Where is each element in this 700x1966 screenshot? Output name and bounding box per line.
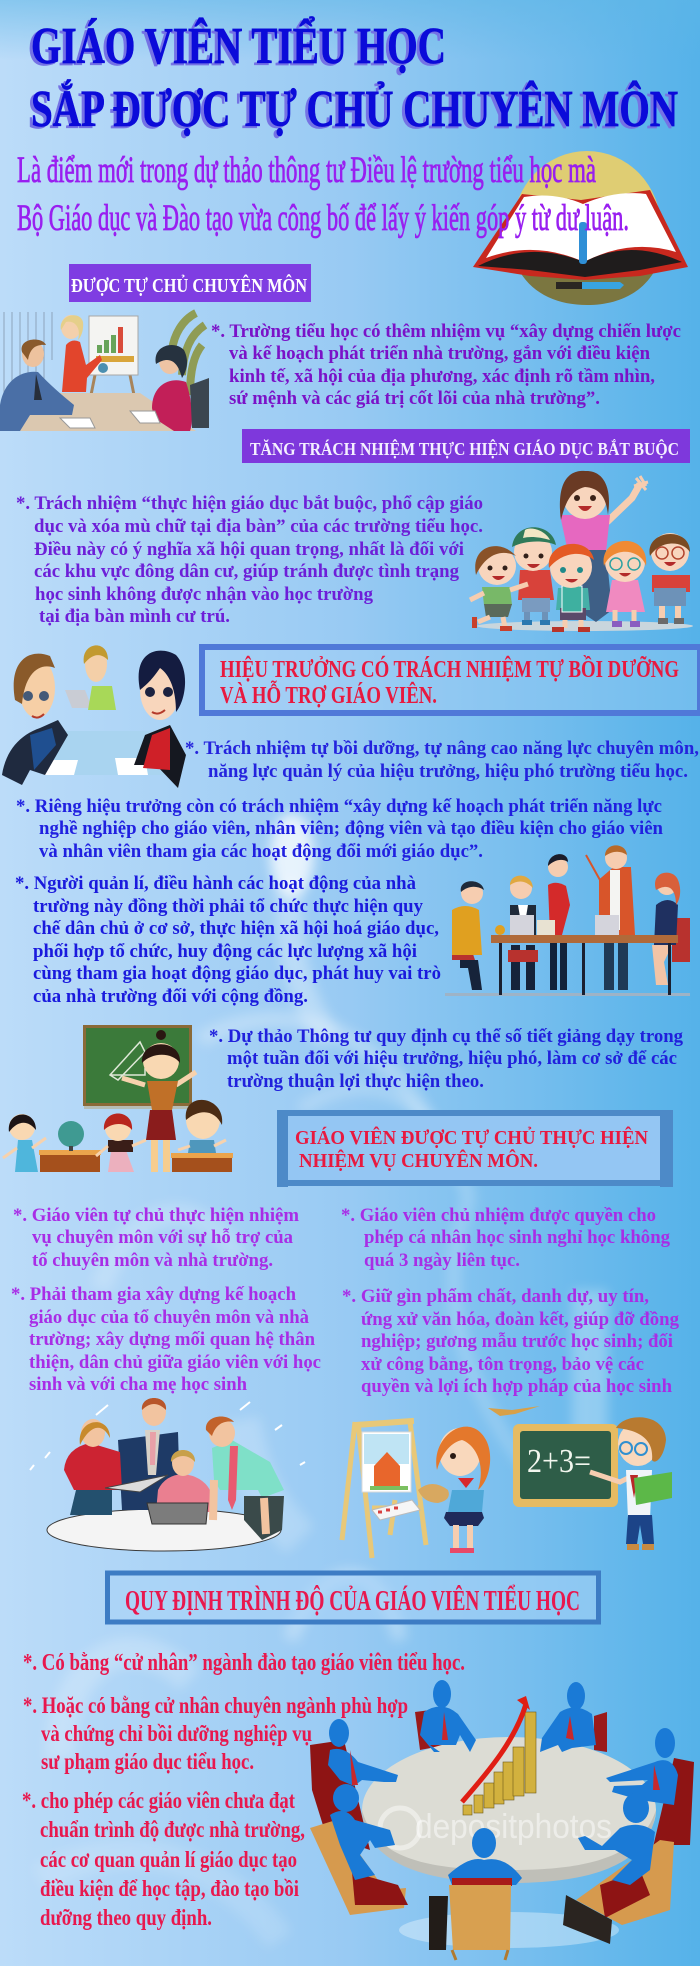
paragraph: số tiết giảng dạy: *. Dự thảo Thông tư quy định cụ thể số tiết giảng dạy trong (209, 1026, 683, 1047)
paragraph: chưa đạt chuẩn: các cơ quan quản lí giáo dục tạo (40, 1847, 297, 1872)
heading: tăng trách nhiệm (242, 429, 690, 463)
kid B (512, 527, 556, 625)
paragraph: chứng chỉ bồi dưỡng: và chứng chỉ bồi dưỡng nghiệp vụ (41, 1721, 312, 1746)
illustration: teacher with pupils (3, 1025, 233, 1172)
kid D (604, 541, 646, 627)
person A (420, 1680, 476, 1752)
paragraph: chứng chỉ bồi dưỡng (23, 1693, 408, 1774)
paragraph: số tiết giảng dạy: một tuần đối với hiệu trưởng, hiệu phó, làm cơ sở để các (227, 1048, 677, 1069)
paragraph: giáo dục bắt buộc (16, 493, 483, 627)
paragraph: nhiệm vụ xây dựng chiến lược: kinh tế, xã hội của địa phương, xác định rõ tầm nhìn, (229, 366, 655, 387)
illustration: painting girl and boy at blackboard (342, 1406, 672, 1558)
heading: giáo viên được tự chủ: NHIỆM VỤ CHUYÊN MÔN. (299, 1148, 538, 1172)
briefcases (429, 1895, 612, 1950)
paragraph: tự bồi dưỡng (185, 738, 699, 782)
paragraph: chứng chỉ bồi dưỡng: *. Hoặc có bằng cử nhân chuyên ngành phù hợp (23, 1693, 408, 1718)
paragraph: hỗ trợ của tổ chuyên môn (13, 1205, 299, 1271)
paragraph: giáo dục bắt buộc: dục và xóa mù chữ tại địa bàn” của các trường tiểu học. (34, 516, 483, 537)
paragraph: bằng cử nhân: *. Có bằng “cử nhân” ngành đào tạo giáo viên tiểu học. (23, 1650, 465, 1676)
board sum: 2+3= (527, 1443, 591, 1480)
person E with chair (310, 1784, 408, 1915)
paragraph: số tiết giảng dạy: trường thuận lợi thực hiện theo. (227, 1071, 484, 1092)
paragraph: chưa đạt chuẩn: chuẩn trình độ được nhà trường, (40, 1817, 305, 1842)
person G with chair (448, 1828, 522, 1960)
paragraph: dân chủ ở cơ sở (15, 873, 441, 1007)
paragraph: kế hoạch phát triển năng lực (16, 796, 663, 862)
illustration: round table meeting with growth chart (310, 1680, 694, 1960)
illustration: school leaders at table (2, 645, 186, 788)
kid C (549, 544, 594, 632)
paragraph: kế hoạch phát triển năng lực: nghề nghiệp cho giáo viên, nhân viên; động viên và tạo điều kiện cho giáo viên (39, 818, 663, 839)
paragraph: dân chủ ở cơ sở: chế dân chủ ở cơ sở, thực hiện xã hội hoá giáo dục, (33, 918, 439, 939)
paragraph: giữ gìn phẩm chất: *. Giữ gìn phẩm chất, danh dự, uy tín, (342, 1286, 649, 1307)
kid E (649, 533, 690, 624)
person B (540, 1682, 596, 1752)
paragraph: hỗ trợ của tổ chuyên môn: tổ chuyên môn và nhà trường. (32, 1250, 273, 1271)
paragraph: học sinh nghỉ học (341, 1205, 670, 1271)
paragraph: dân chủ ở cơ sở: *. Người quản lí, điều hành các hoạt động của nhà (15, 873, 416, 894)
paragraph: giáo dục bắt buộc: *. Trách nhiệm “thực hiện giáo dục bắt buộc, phổ cập giáo (16, 493, 483, 514)
paragraph: học sinh nghỉ học: phép cá nhân học sinh nghỉ học không (364, 1227, 670, 1248)
paragraph: dân chủ ở cơ sở: của nhà trường đối với cộng đồng. (33, 986, 308, 1007)
paragraph: tự bồi dưỡng: *. Trách nhiệm tự bồi dưỡng, tự nâng cao năng lực chuyên môn, (185, 738, 699, 759)
paragraph: tự bồi dưỡng: năng lực quản lý của hiệu trưởng, hiệu phó trường tiểu học. (208, 761, 688, 782)
heading: giáo viên được tự chủ: GIÁO VIÊN ĐƯỢC TỰ CHỦ THỰC HIỆN (295, 1125, 648, 1149)
heading: được tự chủ chuyên môn: ĐƯỢC TỰ CHỦ CHUYÊN MÔN (71, 273, 307, 297)
paragraph: nhiệm vụ xây dựng chiến lược: sứ mệnh và các giá trị cốt lõi của nhà trường”. (229, 388, 600, 409)
paragraph: chưa đạt chuẩn (22, 1788, 305, 1930)
watermark: depositphotos (415, 1808, 612, 1846)
paragraph: giáo dục bắt buộc: các khu vực đông dân cư, giúp tránh được tình trạng (34, 561, 459, 582)
paragraph: giữ gìn phẩm chất: quyền và lợi ích hợp pháp của học sinh (361, 1376, 672, 1397)
paragraph: nhiệm vụ xây dựng chiến lược (211, 321, 681, 409)
paragraph: chứng chỉ bồi dưỡng: sư phạm giáo dục tiểu học. (41, 1749, 254, 1774)
kid A (470, 546, 528, 631)
paragraph: hỗ trợ của tổ chuyên môn: *. Giáo viên tự chủ thực hiện nhiệm (13, 1205, 299, 1226)
paragraph: kế hoạch phát triển năng lực: *. Riêng hiệu trưởng còn có trách nhiệm “xây dựng kế hoạch phát triển năng lực (16, 796, 662, 817)
illustration: team around long table (445, 845, 690, 996)
paragraph: giáo dục bắt buộc: Điều này có ý nghĩa xã hội quan trọng, nhất là đối với (34, 539, 464, 560)
heading: hiệu trưởng (202, 647, 700, 713)
paragraph: kế hoạch phát triển năng lực: và nhân viên tham gia các hoạt động đổi mới giáo dục”. (39, 841, 483, 862)
paragraph: chưa đạt chuẩn: dưỡng theo quy định. (40, 1905, 212, 1930)
illustration: open book with pen (473, 151, 688, 305)
intro text (17, 150, 629, 239)
person C (328, 1719, 398, 1786)
paragraph: xây dựng kế hoạch giáo dục: *. Phải tham gia xây dựng kế hoạch (11, 1284, 296, 1305)
paragraph: chưa đạt chuẩn: điều kiện để học tập, đào tạo bồi (40, 1876, 299, 1901)
paragraph: dân chủ ở cơ sở: cùng tham gia hoạt động giáo dục, phát huy vai trò (33, 963, 441, 984)
paragraph: nhiệm vụ xây dựng chiến lược: và kế hoạch phát triển nhà trường, gắn với điều kiện (229, 343, 650, 364)
paragraph: giữ gìn phẩm chất: nghiệp; gương mẫu trước học sinh; đối (361, 1331, 673, 1352)
paragraph: học sinh nghỉ học: *. Giáo viên chủ nhiệm được quyền cho (341, 1205, 656, 1226)
paragraph: chưa đạt chuẩn: *. cho phép các giáo viên chưa đạt (22, 1788, 295, 1813)
paragraph: giữ gìn phẩm chất: xử công bằng, tôn trọng, bảo vệ các (361, 1354, 644, 1375)
illustration: teacher and children (470, 471, 693, 632)
paragraph: dân chủ ở cơ sở: trường này đồng thời phải tổ chức thực hiện quy (33, 896, 423, 917)
paragraph: xây dựng kế hoạch giáo dục: giáo dục của tổ chuyên môn và nhà (29, 1307, 309, 1328)
paragraph: giữ gìn phẩm chất (342, 1286, 679, 1397)
paragraph: giáo dục bắt buộc: tại địa bàn mình cư trú. (39, 606, 230, 627)
paragraph: nhiệm vụ xây dựng chiến lược: *. Trường tiểu học có thêm nhiệm vụ “xây dựng chiến lược (211, 321, 681, 342)
heading: được tự chủ chuyên môn (69, 264, 311, 302)
heading: quy định trình độ (108, 1573, 598, 1622)
paragraph: hỗ trợ của tổ chuyên môn: vụ chuyên môn với sự hỗ trợ của (32, 1227, 293, 1248)
paragraph: giữ gìn phẩm chất: ứng xử văn hóa, đoàn kết, giúp đỡ đồng (361, 1309, 679, 1330)
title (31, 16, 678, 138)
heading: hiệu trưởng: VÀ HỖ TRỢ GIÁO VIÊN. (220, 681, 437, 709)
person F with chair (576, 1793, 674, 1925)
paragraph: giáo dục bắt buộc: học sinh không được nhận vào học trường (35, 584, 373, 605)
paragraph: xây dựng kế hoạch giáo dục (11, 1284, 321, 1395)
paragraph: dân chủ ở cơ sở: phối hợp tổ chức, huy động các lực lượng xã hội (33, 941, 417, 962)
growth chart (462, 1696, 536, 1815)
illustration: office meeting (0, 312, 209, 431)
illustration: teachers around laptop (30, 1398, 305, 1551)
heading: giáo viên được tự chủ (277, 1110, 673, 1187)
paragraph: học sinh nghỉ học: quá 3 ngày liên tục. (364, 1250, 520, 1271)
paragraph: số tiết giảng dạy (209, 1026, 683, 1092)
paragraph: xây dựng kế hoạch giáo dục: trường; xây dựng mối quan hệ thân (29, 1329, 315, 1350)
paragraph: xây dựng kế hoạch giáo dục: thiện, dân chủ giữa giáo viên với học (29, 1352, 321, 1373)
paragraph: xây dựng kế hoạch giáo dục: sinh và với cha mẹ học sinh (29, 1374, 247, 1395)
person D (606, 1728, 678, 1805)
title: GIÁO VIÊN TIỂU HỌC (31, 16, 446, 75)
